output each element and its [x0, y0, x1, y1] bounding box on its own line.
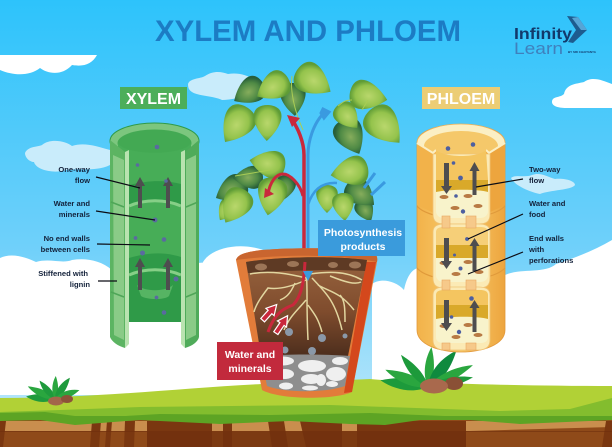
drainage stones — [261, 354, 350, 391]
bush: left grass and rocks — [26, 376, 81, 406]
logo: Infinity Learn: BY SRI CHAITANYA — [568, 50, 597, 54]
xylem callouts: flow — [75, 176, 90, 185]
pot grey pebbles — [282, 328, 348, 355]
xylem callouts: Stiffened with — [38, 269, 88, 278]
xylem callouts — [38, 165, 155, 289]
title: XYLEM AND PHLOEM — [155, 15, 461, 48]
xylem callouts: between cells — [41, 245, 90, 254]
logo: Infinity Learn: Learn — [514, 40, 563, 58]
soil — [246, 257, 367, 356]
phloem chamber 3 — [433, 287, 490, 350]
plant pot — [236, 248, 377, 398]
label: PHLOEM: PHLOEM — [427, 91, 495, 108]
xylem callouts: Water and — [54, 199, 90, 208]
label: photosynthesis products: products — [341, 241, 386, 253]
red root stem arrows — [259, 262, 305, 336]
phloem flow arrows — [441, 162, 480, 332]
diagram: phloem sieve tube — [417, 124, 505, 352]
red water arrows in stem — [264, 115, 304, 262]
plant leaves — [210, 57, 412, 230]
logo: Infinity Learn — [514, 16, 597, 58]
label: PHLOEM — [422, 87, 500, 109]
phloem callouts: Water and — [529, 199, 566, 208]
label: photosynthesis products: Photosynthesis — [324, 227, 402, 239]
ground — [0, 379, 612, 447]
xylem mineral particles — [134, 145, 178, 315]
phloem callouts — [468, 165, 573, 274]
xylem callouts: lignin — [70, 280, 90, 289]
xylem outer walls — [110, 140, 199, 348]
xylem flow arrows — [135, 177, 173, 290]
phloem callouts: flow — [529, 176, 544, 185]
phloem callouts: food — [529, 210, 546, 219]
roots — [250, 272, 362, 340]
label: water and minerals — [217, 342, 283, 380]
bush: right grass and rocks — [380, 347, 475, 394]
xylem callouts: No end walls — [44, 234, 90, 243]
label: photosynthesis products — [318, 220, 405, 256]
xylem callouts: One-way — [58, 165, 91, 174]
soil strata — [0, 416, 612, 447]
diagram: xylem vessel — [110, 123, 199, 348]
phloem callouts: perforations — [529, 256, 573, 265]
blue photosynthesis arrows in stem — [308, 109, 385, 262]
phloem callouts: with — [528, 245, 545, 254]
clouds — [0, 55, 612, 395]
logo: Infinity Learn: Infinity — [514, 26, 572, 43]
phloem callouts: Two-way — [529, 165, 561, 174]
phloem chamber 1 — [433, 150, 490, 224]
phloem food particles — [446, 142, 475, 334]
xylem callouts: minerals — [59, 210, 90, 219]
phloem end wall connectors — [442, 216, 476, 350]
phloem callouts: End walls — [529, 234, 564, 243]
label: XYLEM: XYLEM — [126, 91, 181, 108]
phloem chamber 2 — [433, 224, 490, 288]
label: water and minerals: Water and — [225, 349, 275, 361]
label: water and minerals: minerals — [228, 363, 272, 375]
label: XYLEM — [120, 87, 187, 109]
blue stem arrow head in pot — [303, 271, 313, 281]
